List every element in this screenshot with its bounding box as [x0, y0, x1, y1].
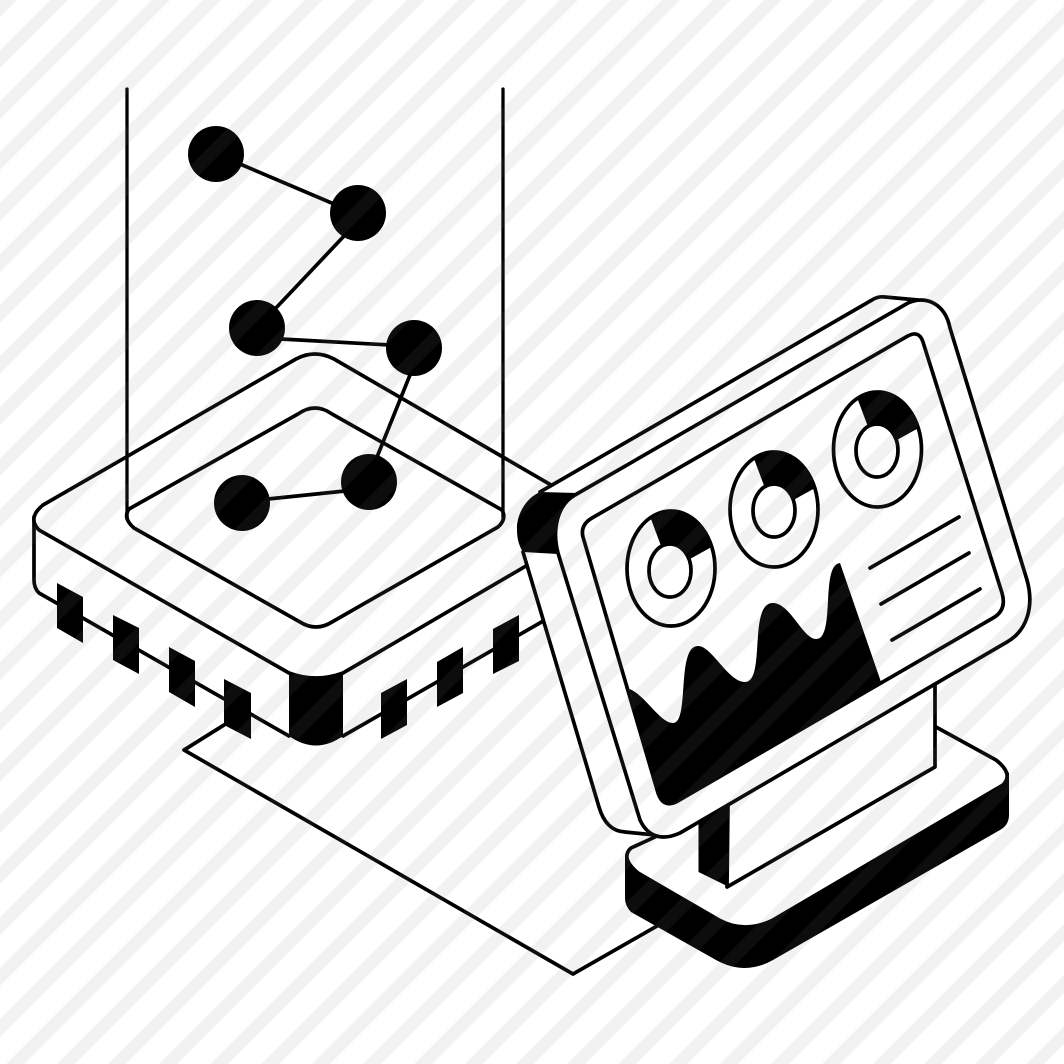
monitor base: [625, 727, 1009, 968]
network links: [240, 164, 412, 499]
monitor dark corner: [517, 492, 577, 554]
monitor stand: [698, 683, 935, 887]
stand light face: [727, 683, 935, 887]
donut gauge 2: [728, 450, 820, 569]
chip pins left: [57, 583, 251, 739]
chip top face: [34, 354, 608, 678]
chip side wall: [34, 517, 560, 746]
monitor: [517, 297, 1030, 837]
base thickness: [625, 760, 1009, 968]
monitor back edges: [523, 297, 918, 835]
network graph: [188, 126, 442, 531]
network nodes: [188, 126, 442, 531]
floor outline: [184, 725, 657, 974]
donut gauge 1: [625, 509, 717, 628]
text lines: [870, 517, 980, 640]
chip: [34, 354, 608, 746]
base top face: [627, 727, 1007, 927]
chip side lower edges: [34, 517, 545, 736]
chip front corner: [289, 672, 343, 746]
chip inner recess: [127, 408, 504, 627]
monitor front frame: [556, 300, 1030, 837]
donut gauge 3: [832, 390, 924, 509]
monitor back silhouette: [519, 297, 1029, 835]
stand dark side: [698, 803, 729, 887]
chip pins right: [381, 615, 519, 739]
glass column edges: [127, 89, 503, 518]
screen: [582, 334, 1003, 804]
area chart: [630, 563, 881, 804]
